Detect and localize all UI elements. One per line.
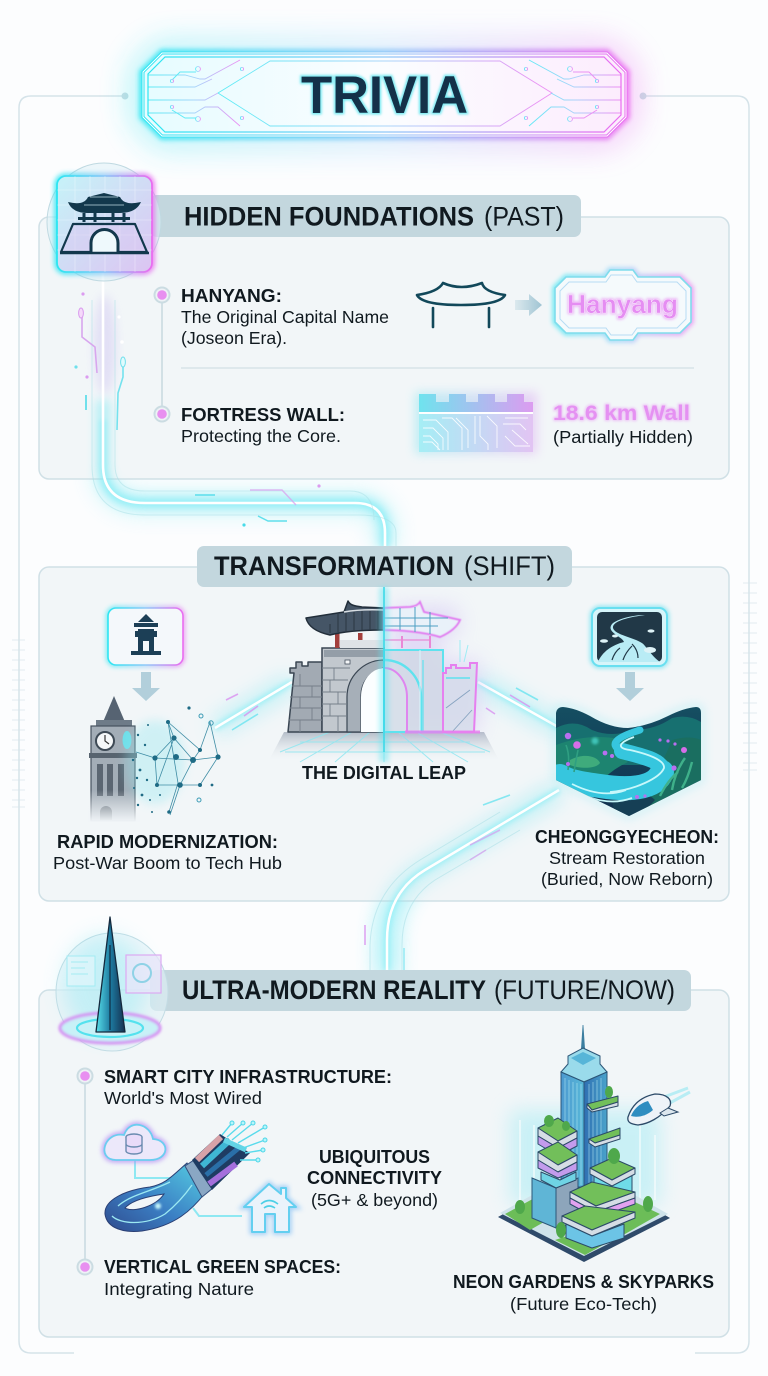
panel 1 heading: (PAST): [484, 202, 564, 232]
panel 1 heading: [150, 195, 581, 237]
text: neon gardens: (Future Eco-Tech): [510, 1294, 657, 1314]
text: rapid modernization: [53, 831, 282, 873]
illustration: the digital gate: [268, 587, 500, 762]
title glow: [142, 52, 627, 137]
text: rapid modernization: Post-War Boom to Tech Hub: [53, 853, 282, 873]
divider: [181, 367, 694, 369]
panel: ultra-modern reality: [39, 917, 729, 1337]
text: wall length: 18.6 km Wall: [553, 401, 690, 425]
bullet: smart city: [78, 1068, 92, 1084]
skypark terraces: [538, 1096, 635, 1248]
timeline connector: [84, 1083, 86, 1260]
title circuit traces: [148, 60, 621, 126]
building base plate: [498, 1166, 670, 1262]
icon: small pagoda box: [108, 608, 183, 665]
text: cheonggyecheon: CHEONGGYECHEON:: [535, 826, 719, 847]
icon: lotte tower hologram: [56, 917, 168, 1051]
text: neon gardens: [453, 1271, 714, 1314]
arrow: name change: [515, 294, 542, 316]
flow: diagonal connectors: [215, 682, 560, 990]
badge: hanyang: Hanyang: [567, 289, 678, 319]
panel 3 heading: ULTRA-MODERN REALITY: [182, 975, 486, 1005]
flow glow: shift to future: [387, 790, 559, 972]
main tower: [561, 1025, 607, 1187]
text: smart city: World's Most Wired: [104, 1088, 262, 1108]
gate central beam: [379, 587, 389, 762]
text: cheonggyecheon: (Buried, Now Reborn): [541, 869, 713, 889]
gate arch interior: [361, 668, 407, 732]
text: smart city: SMART CITY INFRASTRUCTURE:: [104, 1066, 392, 1087]
text: rapid modernization: RAPID MODERNIZATION:: [57, 831, 278, 852]
text: ubiquitous connectivity: CONNECTIVITY: [307, 1167, 443, 1188]
text: smart city: [104, 1066, 392, 1108]
arrow: down to stream: [616, 672, 644, 701]
panel 3 heading: (FUTURE/NOW): [494, 975, 675, 1005]
text: fortress wall: [181, 404, 345, 446]
text: fortress wall: Protecting the Core.: [181, 426, 341, 446]
bullet: hanyang: [154, 288, 170, 302]
text: cheonggyecheon: Stream Restoration: [549, 848, 705, 868]
text: hanyang: The Original Capital Name: [181, 307, 389, 327]
text: wall length: 18.6 km Wall: [553, 401, 690, 425]
gate right half: neon wireframe: [384, 602, 480, 732]
text: vertical green: [104, 1256, 341, 1299]
text: fortress wall: FORTRESS WALL:: [181, 404, 345, 425]
panel 1 heading: HIDDEN FOUNDATIONS: [184, 202, 474, 232]
text: hanyang: [181, 285, 389, 348]
panel 2 heading: (SHIFT): [464, 551, 555, 581]
text: ubiquitous connectivity: [307, 1146, 443, 1210]
text: cheonggyecheon: [535, 826, 719, 889]
text: wall length: (Partially Hidden): [553, 427, 693, 447]
icon: roof outline: [417, 283, 505, 327]
gate pink glow: [390, 606, 480, 732]
icon: circuit wall: [415, 392, 537, 454]
illustration: fiber cable with cloud and home: [104, 1121, 296, 1232]
connector lines: [135, 1160, 242, 1216]
icon: flying vehicle: [628, 1088, 690, 1125]
title text: TRIVIA: [301, 66, 468, 125]
arrow: down to tower: [132, 672, 160, 701]
illustration: eco-tech skyscraper: [498, 1025, 670, 1262]
river: [560, 730, 662, 788]
title text: TRIVIA: [301, 66, 468, 125]
panel 1 background: [39, 217, 729, 479]
text: hanyang: (Joseon Era).: [181, 328, 287, 348]
text: neon gardens: NEON GARDENS & SKYPARKS: [453, 1271, 714, 1292]
panel 3 heading: [150, 970, 691, 1011]
gate floor: [268, 732, 500, 762]
panel 3 background: [39, 990, 729, 1337]
icon: wifi house: [244, 1184, 296, 1232]
text: vertical green: VERTICAL GREEN SPACES:: [104, 1256, 341, 1277]
panel: transformation: [39, 546, 729, 990]
text: ubiquitous connectivity: UBIQUITOUS: [319, 1146, 430, 1167]
bullet: vertical green: [78, 1260, 92, 1274]
text: wall length: [553, 401, 693, 447]
panel 2 background: [39, 567, 729, 901]
icon: stream box: [592, 608, 667, 666]
text: ubiquitous connectivity: (5G+ & beyond): [311, 1190, 438, 1210]
bullet: fortress wall: [154, 406, 170, 422]
text: the digital leap: THE DIGITAL LEAP: [302, 762, 466, 783]
icon: cloud database: [104, 1125, 165, 1160]
icon: fortress gate tile: [47, 163, 161, 281]
illustration: cheonggyecheon stream: [556, 705, 702, 817]
text: vertical green: Integrating Nature: [104, 1279, 254, 1299]
badge: hanyang: [555, 270, 691, 340]
decorative ticks: [12, 583, 757, 807]
text: hanyang: HANYANG:: [181, 285, 282, 306]
badge: hanyang: Hanyang: [567, 289, 678, 319]
flow line: past to shift: [74, 272, 396, 548]
icon: fiber cable: [105, 1121, 267, 1231]
panel 2 heading: TRANSFORMATION: [214, 551, 454, 581]
title plate: [142, 52, 627, 137]
low-rise block: [532, 1178, 578, 1228]
gate left half: stone: [288, 601, 384, 732]
illustration: clock tower dissolving into network: [88, 696, 221, 822]
panel 2 heading: [197, 546, 572, 587]
panel: hidden foundations: [39, 163, 729, 548]
trees: [515, 1086, 653, 1238]
outer glow of flow below panel one: [103, 465, 385, 548]
title plate body: [143, 53, 626, 136]
timeline connector: [161, 300, 163, 409]
